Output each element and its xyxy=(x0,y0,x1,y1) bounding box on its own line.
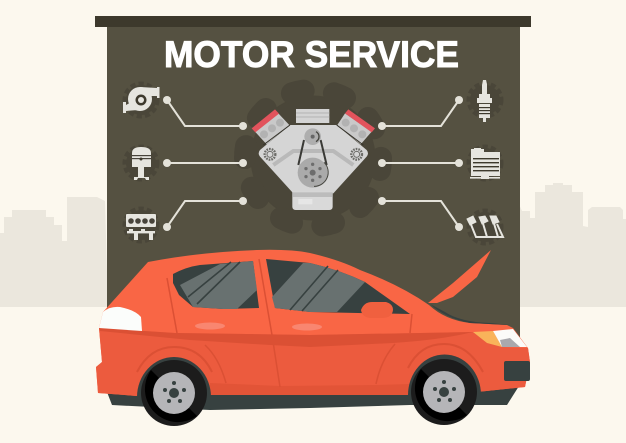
icon: spark plug xyxy=(477,80,492,122)
front window xyxy=(266,259,410,314)
small pulley xyxy=(304,128,321,145)
lower sill xyxy=(107,386,519,410)
engine gear backdrop xyxy=(245,90,381,226)
connector dots xyxy=(163,96,463,231)
rear wheel xyxy=(137,357,211,426)
front wheel xyxy=(408,354,481,425)
icon: piston xyxy=(132,147,151,180)
door lines xyxy=(167,259,412,387)
bottom block xyxy=(292,192,333,210)
tail light xyxy=(99,307,142,331)
rear window xyxy=(173,261,259,309)
open hood gap xyxy=(430,304,510,325)
engine xyxy=(252,109,375,210)
belt xyxy=(298,140,327,165)
large pulley xyxy=(298,158,328,188)
sill shadow xyxy=(210,383,410,395)
side mirror xyxy=(361,302,393,318)
headlight xyxy=(473,329,527,347)
right small gear xyxy=(351,149,362,160)
wheel arch highlights xyxy=(137,344,483,372)
icon gears xyxy=(125,84,501,243)
right cylinder head xyxy=(337,109,375,144)
title: MOTOR SERVICE xyxy=(164,34,459,75)
car hood xyxy=(428,250,491,303)
top block xyxy=(296,109,329,123)
left cylinder head xyxy=(252,109,289,144)
icon: turbocharger xyxy=(123,87,160,113)
lower body xyxy=(96,328,530,397)
garage roof xyxy=(95,16,531,27)
crease band xyxy=(99,328,473,347)
door handles xyxy=(195,322,322,330)
icon: radiator xyxy=(470,148,500,179)
car body xyxy=(96,250,530,397)
icon: engine block xyxy=(126,214,156,240)
icon: exhaust manifold xyxy=(467,216,503,237)
engine body xyxy=(259,125,368,193)
car xyxy=(96,250,530,426)
skyline: left xyxy=(0,197,108,307)
connector lines xyxy=(167,100,459,227)
front bumper grille xyxy=(504,361,530,381)
skyline: right xyxy=(518,183,626,307)
left small gear xyxy=(265,149,275,160)
garage wall xyxy=(107,27,520,337)
